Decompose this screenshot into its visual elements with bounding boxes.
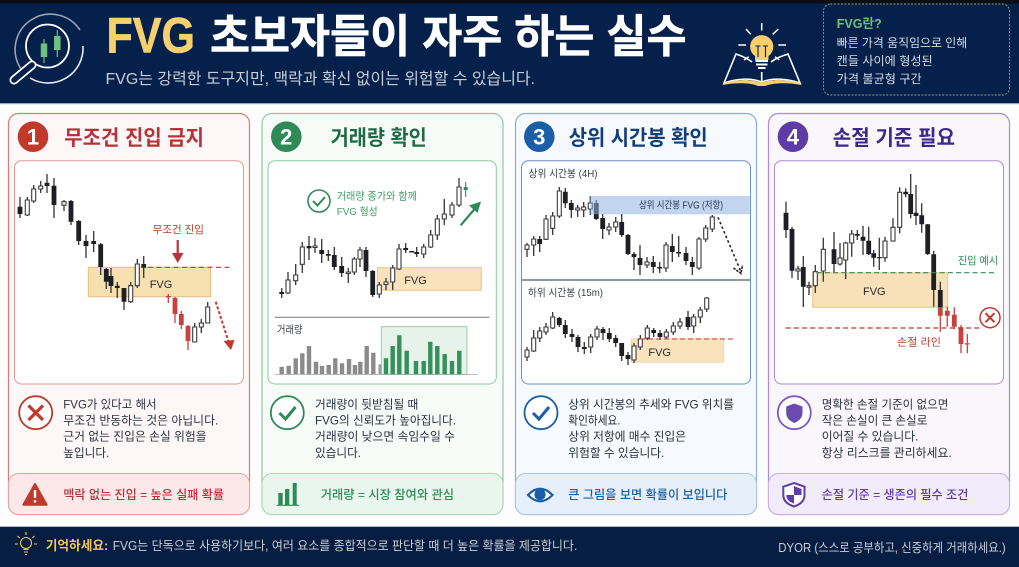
heading 3: 상위 시간봉 확인 <box>569 127 708 150</box>
higher timeframe FVG band <box>590 196 750 214</box>
callout strip 3: 큰 그림을 보면 확률이 보입니다 <box>568 488 728 502</box>
callout strip 1: 맥락 없는 진입 = 높은 실패 확률 <box>63 488 224 502</box>
text block 4 <box>822 397 952 460</box>
number badge 2: 2 <box>280 124 292 150</box>
icon: blue check circle <box>524 396 558 429</box>
chart 2 <box>268 161 496 384</box>
FVG zone <box>377 268 481 290</box>
callout: what is FVG: 빠른 가격 움직임으로 인해 <box>837 36 967 50</box>
number badge 4: 4 <box>787 124 800 150</box>
volume chart <box>275 324 478 374</box>
reminder text: FVG는 단독으로 사용하기보다, 여러 요소를 종합적으로 판단할 때 더 높은 확률을 제공합니다. <box>113 539 577 553</box>
header banner <box>0 0 1019 104</box>
text block 3: 상위 저항에 매수 진입은 <box>568 430 686 444</box>
chart 4 <box>774 161 1004 384</box>
text block 1: 높입니다. <box>63 446 109 460</box>
label: unconditional entry: 무조건 진입 <box>153 223 204 236</box>
panel 1: no unconditional entry <box>8 114 250 514</box>
text block 4: 이어질 수 있습니다. <box>822 430 918 444</box>
panel 2: check volume <box>262 114 503 514</box>
icon: check with note: FVG 형성 <box>337 206 378 218</box>
icon: split shield <box>783 483 804 506</box>
arrow: up <box>461 202 481 225</box>
callout: what is FVG <box>824 4 1010 95</box>
icon: warning triangle <box>23 484 47 505</box>
number badge 1: 1 <box>27 124 39 150</box>
icon: small bulb <box>15 532 37 554</box>
callout strip 4: 손절 기준 = 생존의 필수 조건 <box>822 488 968 502</box>
icon: x circle <box>19 396 52 429</box>
FVG zone: FVG <box>648 347 671 359</box>
arrow: dashed drop <box>216 302 234 350</box>
text block 2: 있습니다. <box>315 446 361 460</box>
text block 3: 위험할 수 있습니다. <box>568 446 664 460</box>
title: 초보자들이 자주 하는 실수 <box>210 11 686 62</box>
text block 2: 거래량이 뒷받침될 때 <box>315 397 418 411</box>
icon: shield circle <box>778 396 811 429</box>
icon: check with note: 거래량 종가와 함께 <box>337 190 417 202</box>
FVG zone: FVG <box>863 286 886 298</box>
callout strip 3 <box>516 474 756 514</box>
volume chart: 거래량 <box>277 324 303 336</box>
arrow: entry down <box>172 240 184 263</box>
heading 1: 무조건 진입 금지 <box>64 127 204 150</box>
lower timeframe chart: 하위 시간봉 (15m) <box>528 286 603 299</box>
callout: what is FVG: FVG란? <box>837 16 882 31</box>
text block 2: FVG의 신뢰도가 높아집니다. <box>315 413 456 427</box>
callout: what is FVG: 캔들 사이에 형성된 <box>837 54 933 68</box>
reminder text: 기억하세요: <box>46 538 108 553</box>
panel 3: check higher timeframe <box>516 114 756 514</box>
number badge 4 <box>778 121 808 152</box>
chart 3 <box>522 161 750 384</box>
callout strip 1 <box>8 474 250 514</box>
arrow: dotted drop <box>718 217 742 274</box>
text block 3 <box>568 397 734 460</box>
higher timeframe chart <box>525 167 750 275</box>
text block 1: FVG가 있다고 해서 <box>63 397 157 411</box>
footer bar <box>0 526 1019 567</box>
text block 4: 명확한 손절 기준이 없으면 <box>822 397 948 411</box>
icon: magnifier with candles <box>14 14 83 83</box>
lower timeframe chart <box>525 286 733 365</box>
higher timeframe chart: 상위 시간봉 (4H) <box>528 167 598 180</box>
subtitle: FVG는 강력한 도구지만, 맥락과 확신 없이는 위험할 수 있습니다. <box>106 70 535 88</box>
icon: light bulb over open book <box>722 23 802 86</box>
number badge 3: 3 <box>533 124 545 150</box>
icon: stop x <box>980 308 1000 328</box>
text block 3: 확인하세요. <box>568 413 620 427</box>
icon: eye <box>528 489 552 501</box>
FVG zone <box>813 273 948 307</box>
icon: check with note <box>308 190 417 218</box>
icon: check circle <box>271 396 304 429</box>
FVG zone <box>631 339 724 362</box>
FVG zone: FVG <box>404 275 427 287</box>
text block 2 <box>315 397 456 460</box>
number badge 2 <box>271 121 302 152</box>
FVG zone: FVG <box>150 279 172 291</box>
heading 2: 거래량 확인 <box>331 127 427 150</box>
text block 4: 항상 리스크를 관리하세요. <box>822 446 952 460</box>
callout strip 2 <box>262 474 503 514</box>
panel 4: stop-loss needed <box>768 114 1010 514</box>
label: entry example: 진입 예시 <box>958 254 998 267</box>
icon: bars <box>277 483 299 505</box>
text block 2: 거래량이 낮으면 속임수일 수 <box>315 430 455 444</box>
FVG zone <box>88 267 211 297</box>
text block 1: 근거 없는 진입은 손실 위험을 <box>63 430 207 444</box>
number badge 3 <box>524 121 555 152</box>
text block 1: 무조건 반동하는 것은 아닙니다. <box>63 413 218 427</box>
label: stop-loss line: 손절 라인 <box>897 336 941 349</box>
text block 3: 상위 시간봉의 추세와 FVG 위치를 <box>568 397 734 411</box>
text block 4: 작은 손실이 큰 손실로 <box>822 413 927 427</box>
callout strip 4 <box>768 474 1010 514</box>
number badge 1 <box>18 121 48 152</box>
callout strip 2: 거래량 = 시장 참여와 관심 <box>321 487 454 502</box>
chart 1 <box>14 161 244 384</box>
higher timeframe FVG band: 상위 시간봉 FVG (저항) <box>639 198 723 212</box>
heading 4: 손절 기준 필요 <box>833 127 955 150</box>
callout: what is FVG: 가격 불균형 구간 <box>837 72 922 86</box>
text block 1 <box>63 397 218 460</box>
title: FVG <box>106 8 195 64</box>
